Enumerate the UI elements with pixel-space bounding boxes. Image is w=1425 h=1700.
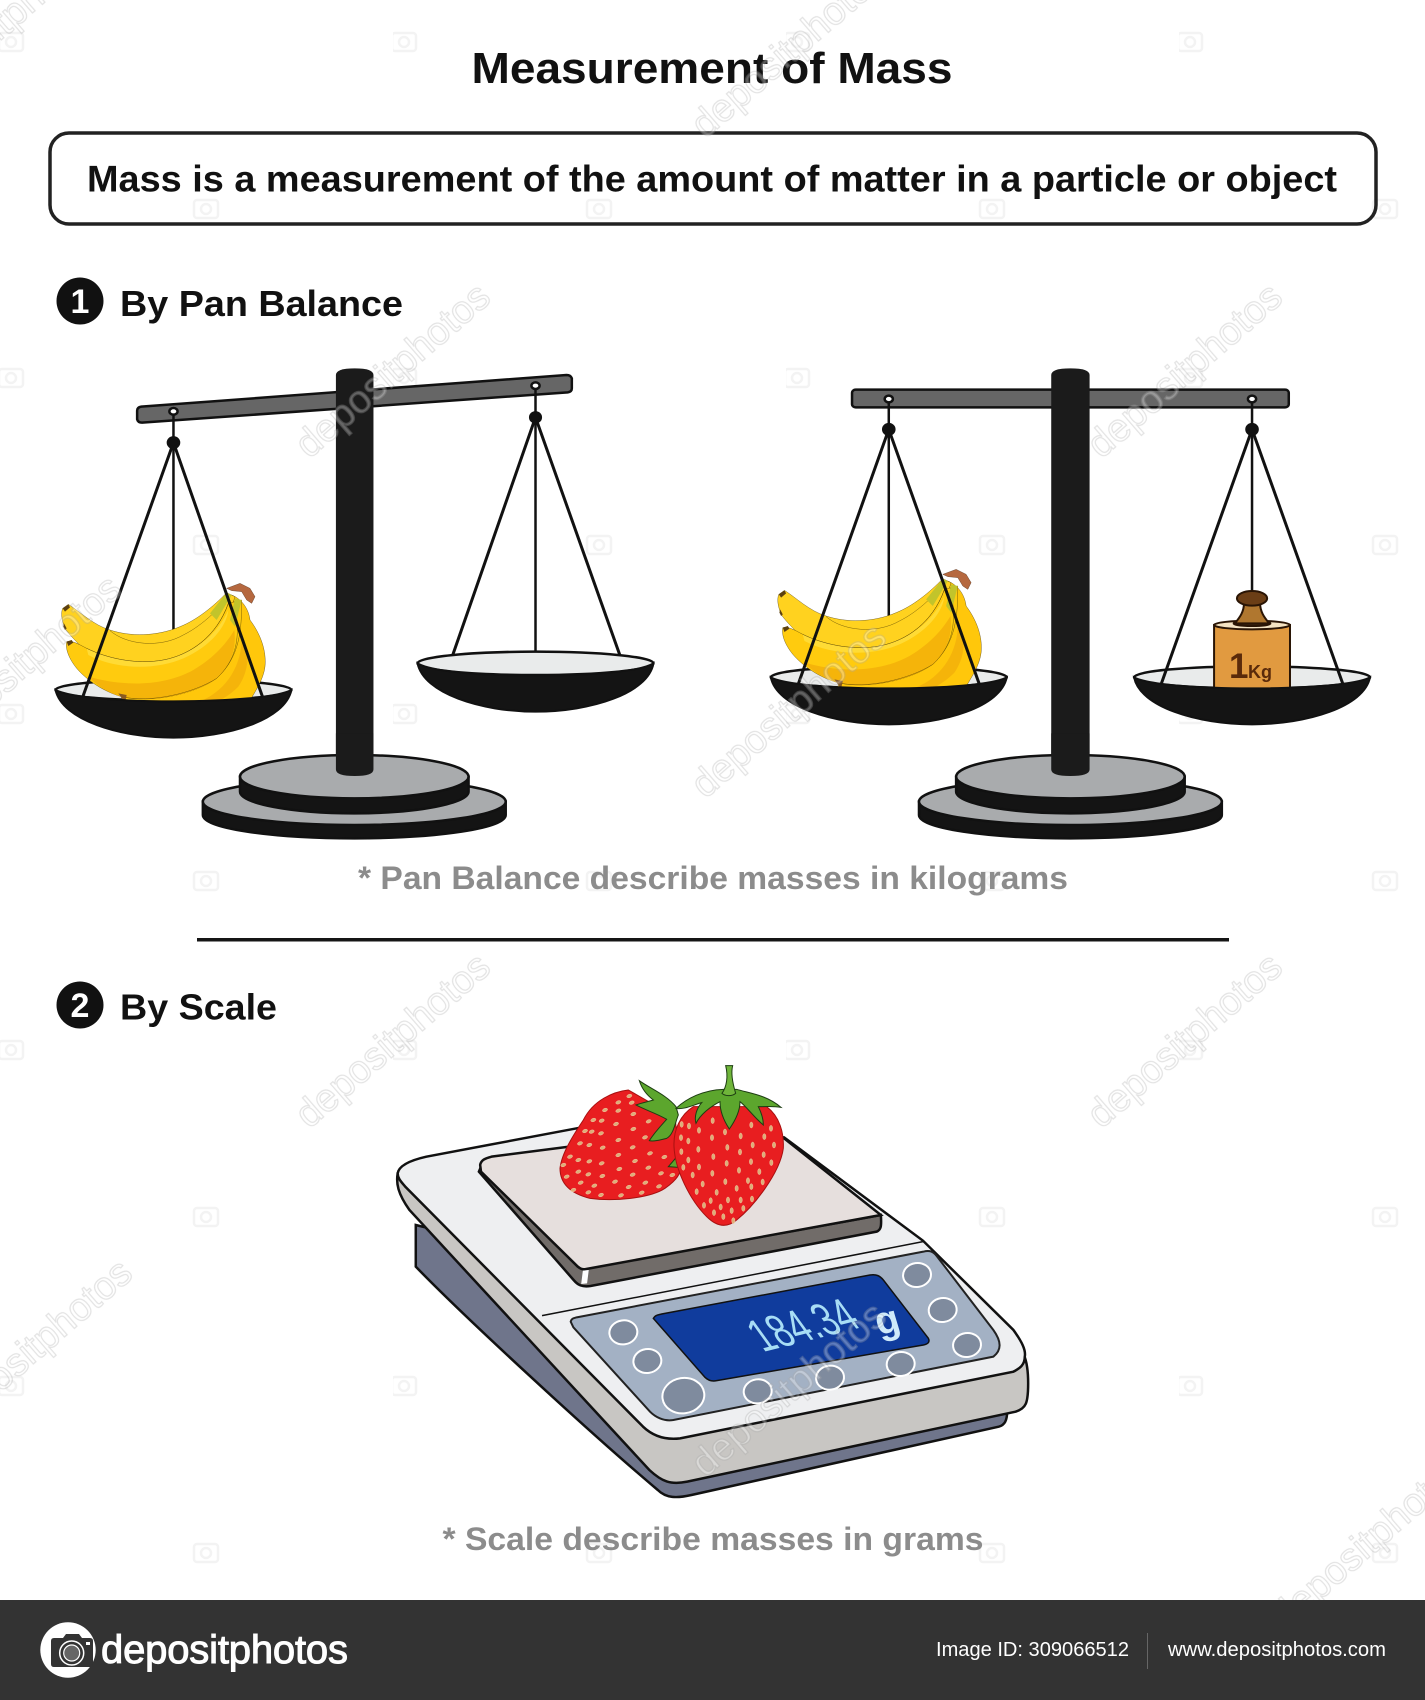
footer logo icon (40, 1622, 96, 1678)
left pan rim (771, 666, 1007, 688)
post (1051, 368, 1090, 776)
right hanger strings (1248, 396, 1256, 593)
base (919, 755, 1222, 838)
right strawberry (674, 1107, 783, 1225)
right pan bowl (1134, 677, 1370, 724)
beam (137, 375, 572, 423)
website: www.depositphotos.com (1167, 1639, 1386, 1661)
footer logo wordmark: depositphotos (101, 1628, 348, 1672)
post (336, 368, 373, 776)
weight label: 1 Kg (1229, 647, 1272, 686)
left strawberry (560, 1090, 680, 1200)
pan balance: unbalanced, bananas only (56, 368, 653, 838)
right strings (1161, 424, 1343, 683)
right pan rim (1134, 666, 1370, 688)
scale top surface (398, 1127, 1025, 1439)
right empty pan (418, 652, 653, 712)
left center string (885, 396, 893, 623)
heading: by scale (56, 982, 277, 1028)
diagonal watermarks: depositphotos (683, 1294, 895, 1485)
image id: Image ID: 309066512 (936, 1639, 1129, 1661)
heading: by pan balance (56, 278, 403, 324)
left pan bowl (56, 690, 291, 738)
scale underside (416, 1225, 1007, 1497)
weighing plate (479, 1138, 881, 1286)
control panel (571, 1251, 1000, 1420)
display reading: g (869, 1297, 905, 1344)
strawberries (560, 1066, 783, 1225)
1 kg weight (1214, 591, 1290, 693)
note: scale: * Scale describe masses in grams (442, 1521, 984, 1557)
left strings (83, 438, 262, 697)
diagonal watermarks: depositphotos (287, 275, 499, 466)
definition box (50, 133, 1376, 224)
left pan bowl (771, 677, 1007, 724)
left pan rim (56, 679, 291, 701)
definition box: Mass is a measurement of the amount of matter in a particle or object (87, 158, 1337, 200)
bananas (62, 583, 265, 703)
diagonal watermarks: depositphotos (683, 615, 895, 806)
diagonal watermarks: depositphotos (1079, 945, 1291, 1136)
post foot (336, 733, 373, 776)
left strings (798, 424, 979, 684)
scale body side (397, 1150, 1028, 1483)
heading: by pan balance: 1 (71, 283, 89, 321)
weight label: 1 Kg: 1 (1229, 647, 1248, 686)
weight label: 1 Kg: Kg (1248, 662, 1272, 682)
diagonal watermarks: depositphotos (1079, 275, 1291, 466)
strawberry stem (722, 1066, 736, 1096)
note: pan balance: * Pan Balance describe masses in kilograms (358, 860, 1068, 896)
display reading: 184.34 (736, 1290, 870, 1362)
display (653, 1275, 929, 1381)
left strawberry leaves (636, 1081, 678, 1167)
buttons (608, 1261, 983, 1416)
base (203, 755, 506, 838)
pan balance: balanced, bananas and 1 kg weight (771, 368, 1370, 838)
bananas (778, 569, 981, 689)
beam (852, 390, 1289, 407)
heading: by scale: By Scale (120, 986, 277, 1028)
heading: by pan balance: By Pan Balance (120, 283, 403, 324)
digital scale (397, 1127, 1028, 1497)
left hanger center string (169, 408, 178, 637)
heading: by scale: 2 (71, 987, 89, 1025)
title: Measurement of Mass (472, 44, 952, 93)
post foot (1051, 733, 1090, 776)
diagonal watermarks: depositphotos (287, 945, 499, 1136)
footer bar (0, 1600, 1425, 1700)
right strawberry leaves (676, 1089, 781, 1129)
hanger and strings on the right (447, 382, 626, 672)
panel face (571, 1251, 1000, 1420)
